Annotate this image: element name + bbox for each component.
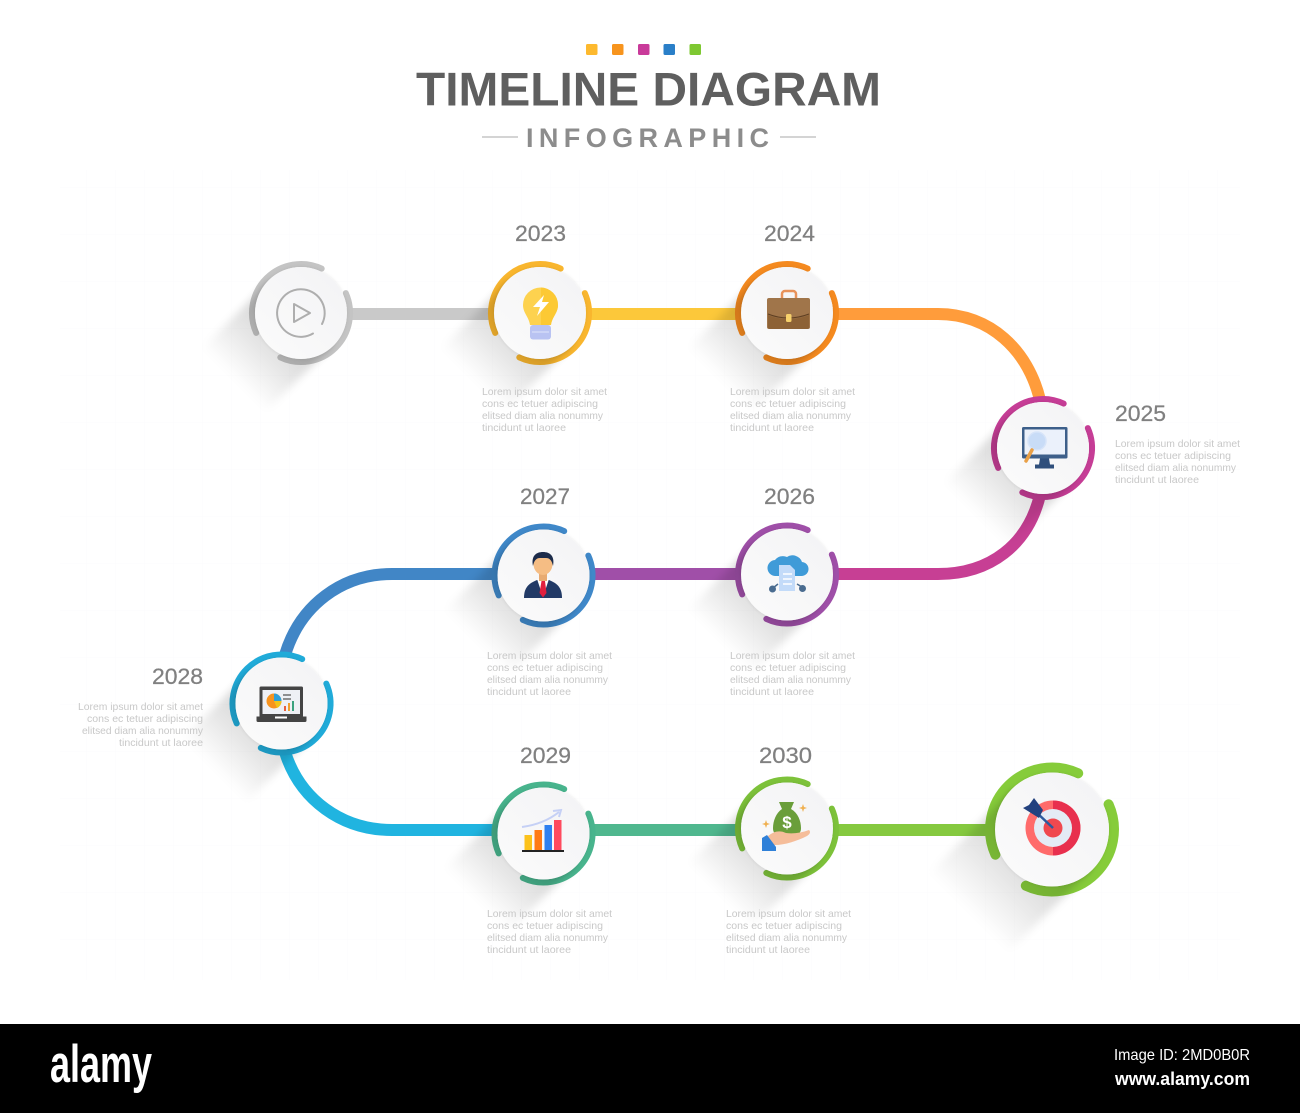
text block: 2025: cons ec tetuer adipiscing (1115, 450, 1231, 462)
icon: monitor with magnifier (1022, 427, 1068, 468)
text block: 2027: tincidunt ut laoree (487, 686, 571, 698)
icon: light bulb (523, 288, 558, 340)
text block: 2024: Lorem ipsum dolor sit amet (730, 386, 855, 398)
footer bar (0, 1024, 1300, 1113)
text block: 2024: tincidunt ut laoree (730, 422, 814, 434)
year label: 2029: 2029 (520, 743, 571, 768)
text block: 2025: tincidunt ut laoree (1115, 474, 1199, 486)
year label: 2030: 2030 (759, 743, 812, 768)
footer logo: alamy (50, 1035, 152, 1094)
text block: 2026: cons ec tetuer adipiscing (730, 662, 846, 674)
heading: TIMELINE DIAGRAM (416, 62, 881, 116)
text block: 2025: Lorem ipsum dolor sit amet (1115, 438, 1240, 450)
connector lines (285, 314, 1040, 830)
node: 2024 (688, 264, 836, 412)
icon: rising bar chart (522, 810, 564, 852)
text block: 2023 (482, 386, 607, 434)
year label: 2025: 2025 (1115, 401, 1166, 426)
text block: 2028: tincidunt ut laoree (119, 737, 203, 749)
title block (416, 44, 881, 153)
text block: 2030: Lorem ipsum dolor sit amet (726, 908, 851, 920)
icon: businessman (524, 552, 562, 598)
text block: 2029: Lorem ipsum dolor sit amet (487, 908, 612, 920)
node: 2027 (445, 527, 593, 674)
year label: 2028: 2028 (152, 664, 203, 689)
text block: 2030: tincidunt ut laoree (726, 944, 810, 956)
text block: 2025 (1115, 438, 1240, 486)
text block: 2028: cons ec tetuer adipiscing (87, 713, 203, 725)
text block: 2026: tincidunt ut laoree (730, 686, 814, 698)
icon: money bag on hand (762, 802, 810, 851)
node: start (202, 264, 350, 412)
node: 2028 (183, 655, 331, 802)
text block: 2024 (730, 386, 855, 434)
text block: 2023: elitsed diam alia nonummy (482, 410, 604, 422)
icon: play (277, 289, 325, 337)
icon: dart target (1023, 798, 1080, 856)
colour squares (586, 44, 701, 55)
text block: 2025: elitsed diam alia nonummy (1115, 462, 1237, 474)
node: 2023 (441, 264, 589, 412)
footer url: www.alamy.com (1114, 1069, 1250, 1089)
text block: 2026: Lorem ipsum dolor sit amet (730, 650, 855, 662)
node: 2026 (688, 526, 836, 673)
year label: 2026: 2026 (764, 484, 815, 509)
icon: money bag on hand: $ (782, 813, 792, 832)
text block: 2030 (726, 908, 851, 956)
text block: 2029 (487, 908, 612, 956)
text block: 2029: tincidunt ut laoree (487, 944, 571, 956)
node: target (929, 768, 1114, 953)
text block: 2024: cons ec tetuer adipiscing (730, 398, 846, 410)
text block: 2023: cons ec tetuer adipiscing (482, 398, 598, 410)
icon: briefcase (767, 291, 810, 329)
text block: 2028: elitsed diam alia nonummy (82, 725, 204, 737)
year label: 2027: 2027 (520, 484, 570, 509)
text block: 2023: Lorem ipsum dolor sit amet (482, 386, 607, 398)
text block: 2029: elitsed diam alia nonummy (487, 932, 609, 944)
text block: 2030: cons ec tetuer adipiscing (726, 920, 842, 932)
subheading: INFOGRAPHIC (526, 123, 769, 153)
icon: cloud document (767, 555, 809, 592)
node: 2030 (688, 780, 836, 927)
text block: 2026: elitsed diam alia nonummy (730, 674, 852, 686)
text block: 2026 (730, 650, 855, 698)
text block: 2027: cons ec tetuer adipiscing (487, 662, 603, 674)
text block: 2027 (487, 650, 612, 698)
text block: 2028: Lorem ipsum dolor sit amet (78, 701, 203, 713)
text block: 2029: cons ec tetuer adipiscing (487, 920, 603, 932)
text block: 2023: tincidunt ut laoree (482, 422, 566, 434)
text block: 2028 (78, 701, 204, 749)
text block: 2024: elitsed diam alia nonummy (730, 410, 852, 422)
text block: 2027: Lorem ipsum dolor sit amet (487, 650, 612, 662)
icon: laptop with charts (256, 686, 306, 722)
node: 2025 (944, 399, 1092, 547)
text block: 2030: elitsed diam alia nonummy (726, 932, 848, 944)
year label: 2023: 2023 (515, 221, 566, 246)
footer image id: Image ID: 2MD0B0R (1114, 1047, 1250, 1064)
node: 2029 (445, 785, 593, 932)
year label: 2024: 2024 (764, 221, 815, 246)
text block: 2027: elitsed diam alia nonummy (487, 674, 609, 686)
